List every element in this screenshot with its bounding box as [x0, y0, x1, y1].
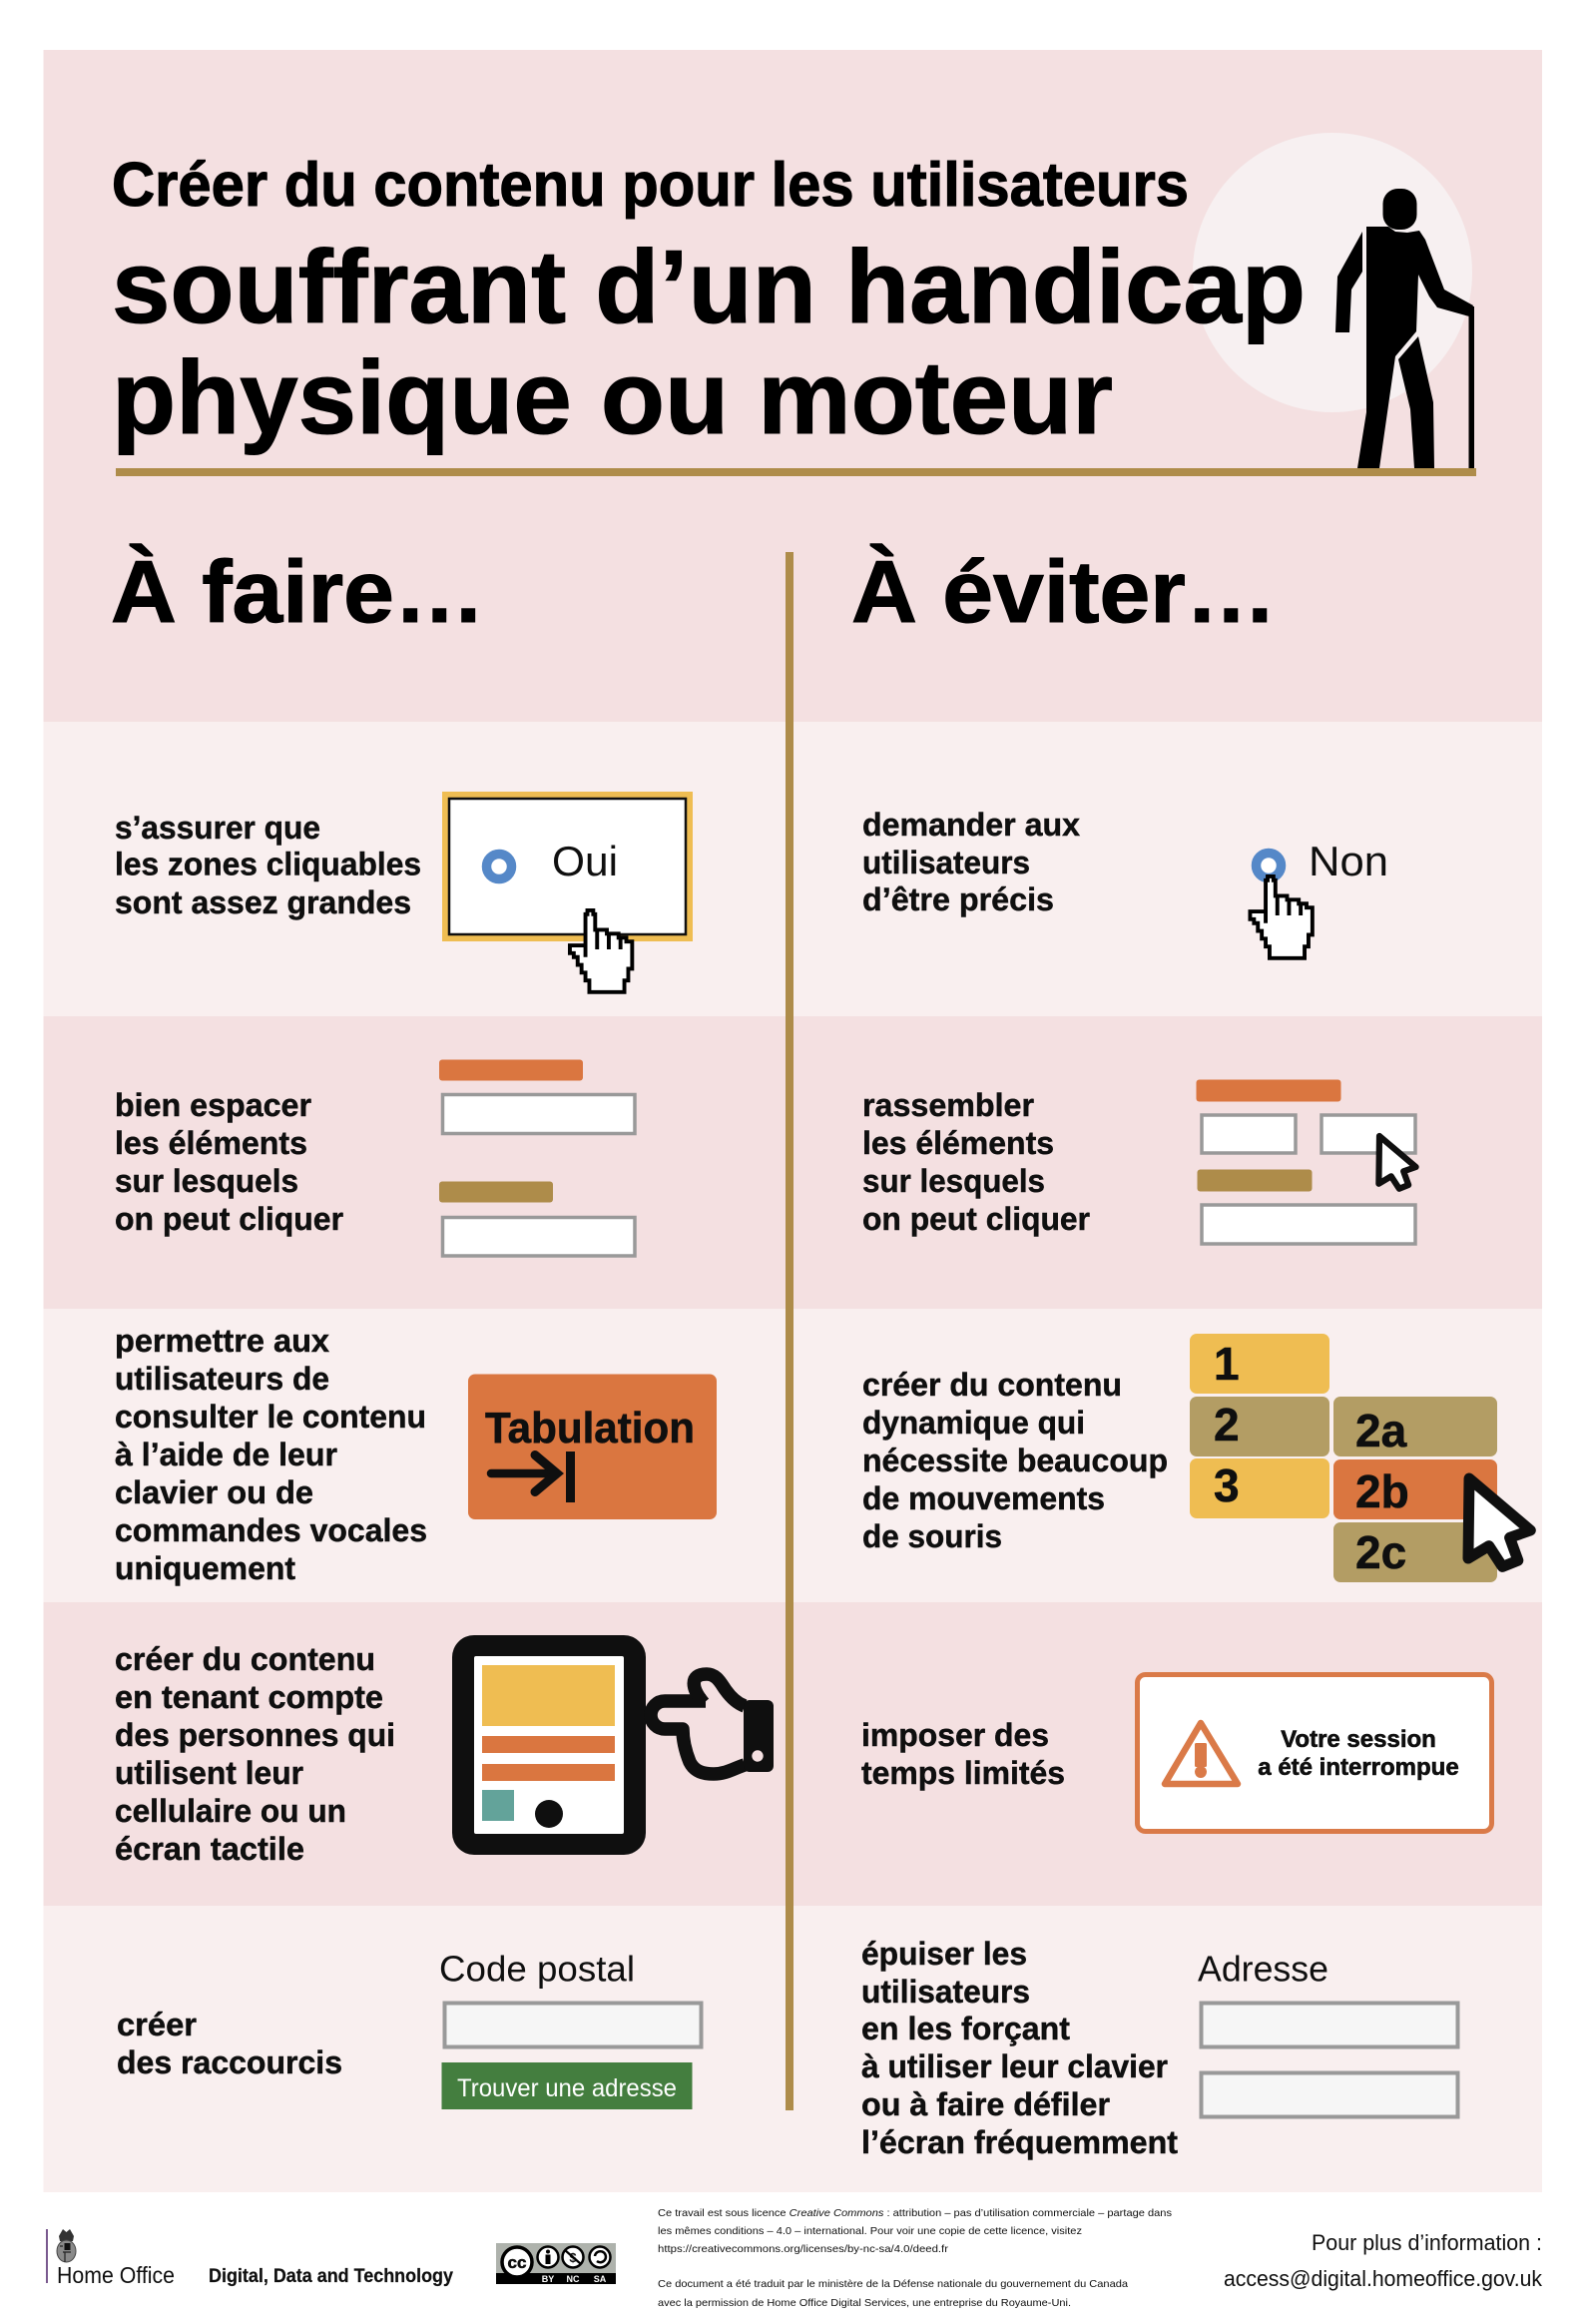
text: licence and translation notice: [658, 2207, 1172, 2309]
text: licence and translation notice: Ce document a été traduit par le ministère de la Défense nationale du gouvernement du Canada: [658, 2278, 1128, 2290]
text: licence and translation notice: avec la permission de Home Office Digital Services, une entreprise du Royaume-Uni.: [658, 2297, 1071, 2309]
badge: Creative Commons BY-NC-SA: cc: [508, 2253, 526, 2272]
badge: Creative Commons BY-NC-SA: $: [569, 2250, 577, 2265]
text: contact information: [1224, 2230, 1543, 2291]
text: do, keyboard and voice: à l’aide de leur: [115, 1437, 337, 1472]
text: do, clickable areas: s’assurer que: [115, 810, 320, 846]
text: avoid, grouping: [862, 1087, 1090, 1237]
text: licence and translation notice: Ce travail est sous licence Creative Commons : attribution – pas d’utilisation commerciale – partage dans: [658, 2207, 1172, 2219]
session timeout alert: Votre session: [1281, 1726, 1436, 1753]
text: avoid, precision: utilisateurs: [862, 845, 1030, 880]
text: do, shortcuts: créer: [117, 2007, 197, 2042]
column divider: [786, 552, 794, 2110]
title underline: [116, 468, 1476, 476]
large radio button with hand cursor: [445, 795, 690, 992]
text: do, clickable areas: [115, 810, 421, 920]
title: [112, 151, 1306, 456]
text: avoid, keyboard effort: l’écran fréquemment: [861, 2124, 1178, 2160]
tab key button: [468, 1374, 717, 1519]
text: avoid, keyboard effort: [861, 1936, 1178, 2160]
text: contact information: access@digital.homeoffice.gov.uk: [1224, 2266, 1543, 2291]
text: avoid, keyboard effort: en les forçant: [861, 2011, 1070, 2046]
text: do, keyboard and voice: permettre aux: [115, 1323, 329, 1359]
text: do, keyboard and voice: clavier ou de: [115, 1474, 313, 1510]
text: do, spacing: les éléments: [115, 1125, 307, 1161]
badge: Creative Commons BY-NC-SA: NC: [567, 2274, 580, 2284]
text: avoid, precision: [862, 807, 1080, 917]
text: do, clickable areas: les zones cliquables: [115, 847, 421, 882]
text: avoid, time limits: temps limités: [861, 1755, 1065, 1791]
text: do, keyboard and voice: utilisateurs de: [115, 1361, 329, 1397]
text: do, shortcuts: [117, 2007, 342, 2080]
text: avoid, dynamic content: de mouvements: [862, 1480, 1105, 1516]
text: do, spacing: bien espacer: [115, 1087, 311, 1123]
text: avoid, dynamic content: dynamique qui: [862, 1405, 1085, 1441]
text: do, keyboard and voice: uniquement: [115, 1550, 295, 1586]
postcode field with find address button: Trouver une adresse: [457, 2074, 677, 2102]
small radio button with hand cursor: Non: [1309, 838, 1388, 884]
text: avoid, precision: d’être précis: [862, 881, 1054, 917]
badge: Creative Commons BY-NC-SA: BY: [542, 2274, 554, 2284]
text: avoid, keyboard effort: utilisateurs: [861, 1974, 1030, 2010]
text: avoid, keyboard effort: épuiser les: [861, 1936, 1027, 1972]
badge: Creative Commons BY-NC-SA: [496, 2243, 616, 2284]
text: contact information: Pour plus d’information :: [1312, 2230, 1542, 2255]
well spaced form fields: [439, 1060, 635, 1256]
tab key button: Tabulation: [485, 1404, 695, 1452]
text: avoid, precision: demander aux: [862, 807, 1080, 843]
text: avoid, time limits: [861, 1717, 1065, 1791]
postcode field with find address button: Code postal: [439, 1949, 635, 1989]
logo: Home Office: Home Office: [57, 2262, 175, 2288]
text: licence and translation notice: les mêmes conditions – 4.0 – international. Pour voir une copie de cette licence, visitez: [658, 2225, 1082, 2237]
text: do, shortcuts: des raccourcis: [117, 2044, 342, 2080]
nested dropdown menu with arrow cursor: 2: [1214, 1399, 1240, 1451]
icon: tablet with pointing hand: [452, 1635, 774, 1855]
logo: Home Office: [46, 2229, 175, 2288]
text: do, mobile and touch: en tenant compte: [115, 1679, 383, 1715]
address fields: [1198, 1949, 1457, 2116]
text: licence and translation notice: https://creativecommons.org/licenses/by-nc-sa/4.0/deed.fr: [658, 2243, 949, 2255]
text: avoid, dynamic content: nécessite beaucoup: [862, 1443, 1168, 1478]
text: do, mobile and touch: [115, 1641, 395, 1867]
text: avoid, time limits: imposer des: [861, 1717, 1049, 1753]
text: do, spacing: on peut cliquer: [115, 1201, 343, 1237]
text: do, keyboard and voice: commandes vocales: [115, 1512, 427, 1548]
nested dropdown menu with arrow cursor: 2b: [1355, 1465, 1409, 1517]
text: do, clickable areas: sont assez grandes: [115, 884, 411, 920]
text: do, mobile and touch: cellulaire ou un: [115, 1793, 346, 1829]
text: do, mobile and touch: écran tactile: [115, 1831, 304, 1867]
text: avoid, keyboard effort: ou à faire défiler: [861, 2086, 1110, 2122]
postcode field with find address button: [439, 1949, 701, 2109]
text: avoid, grouping: les éléments: [862, 1125, 1054, 1161]
text: avoid, dynamic content: [862, 1367, 1168, 1554]
small radio button with hand cursor: [1250, 838, 1388, 958]
title: Créer du contenu pour les utilisateurs: [112, 151, 1189, 220]
title: souffrant d’un handicap: [112, 230, 1306, 345]
session timeout alert: a été interrompue: [1258, 1754, 1459, 1781]
text: Digital, Data and Technology: Digital, Data and Technology: [209, 2266, 453, 2287]
title: physique ou moteur: [112, 340, 1113, 456]
session timeout alert: [1138, 1675, 1491, 1831]
crowded form fields with arrow cursor: [1196, 1080, 1416, 1244]
address fields: Adresse: [1198, 1949, 1328, 1989]
text: do, mobile and touch: des personnes qui: [115, 1717, 395, 1753]
text: avoid, grouping: on peut cliquer: [862, 1201, 1090, 1237]
text: avoid, dynamic content: de souris: [862, 1518, 1002, 1554]
text: avoid, dynamic content: créer du contenu: [862, 1367, 1122, 1403]
icon: man walking with a cane: [1193, 133, 1474, 468]
text: do, spacing: sur lesquels: [115, 1163, 298, 1199]
text: do, keyboard and voice: [115, 1323, 427, 1586]
nested dropdown menu with arrow cursor: 1: [1214, 1338, 1240, 1390]
text: avoid, grouping: sur lesquels: [862, 1163, 1045, 1199]
heading: à éviter: À éviter…: [851, 542, 1277, 641]
text: avoid, grouping: rassembler: [862, 1087, 1034, 1123]
large radio button with hand cursor: Oui: [552, 838, 618, 884]
badge: Creative Commons BY-NC-SA: SA: [594, 2274, 607, 2284]
nested dropdown menu with arrow cursor: 2c: [1355, 1526, 1406, 1578]
nested dropdown menu with arrow cursor: [1190, 1334, 1530, 1582]
text: do, keyboard and voice: consulter le contenu: [115, 1399, 426, 1435]
text: do, mobile and touch: utilisent leur: [115, 1755, 303, 1791]
nested dropdown menu with arrow cursor: 2a: [1355, 1405, 1407, 1456]
heading: à faire: À faire…: [111, 542, 485, 641]
text: do, mobile and touch: créer du contenu: [115, 1641, 375, 1677]
text: do, spacing: [115, 1087, 343, 1237]
text: avoid, keyboard effort: à utiliser leur clavier: [861, 2048, 1168, 2084]
nested dropdown menu with arrow cursor: 3: [1214, 1459, 1240, 1511]
